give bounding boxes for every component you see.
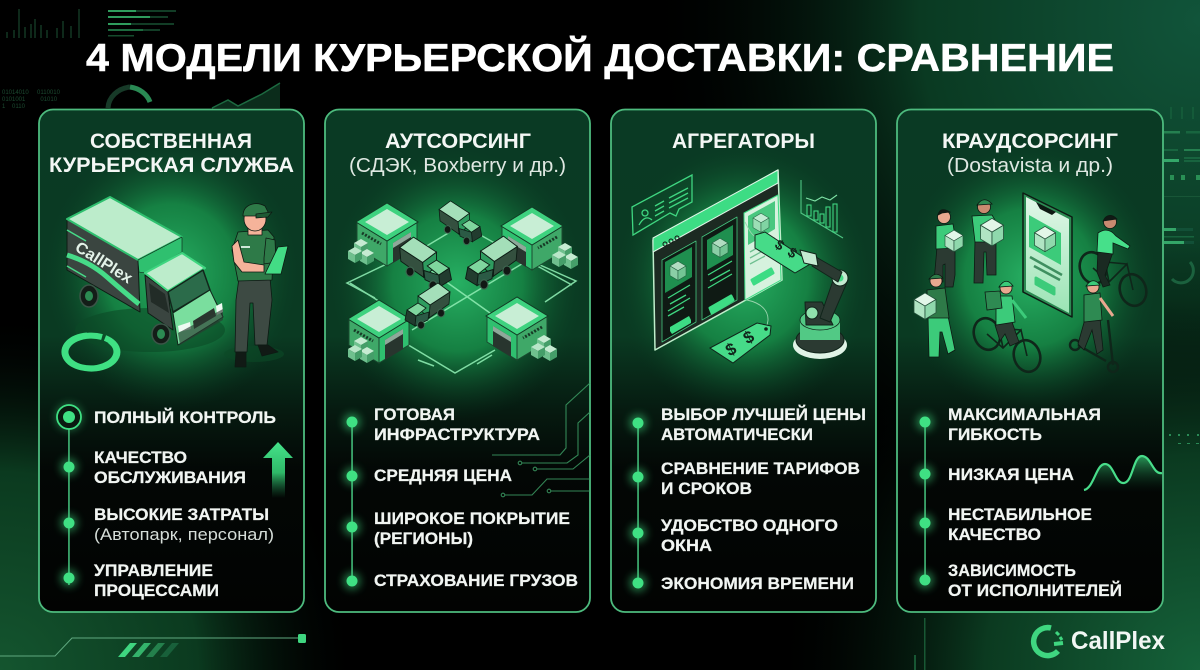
list: собственная служба: ОБСЛУЖИВАНИЯ [94,468,246,487]
panel: аутсорсинг [325,110,590,612]
panel: краудсорсинг [897,110,1163,612]
illustration: bicycle courier right [1076,215,1150,309]
heading: аутсорсинг [349,130,566,177]
logo: CallPlex [1034,627,1165,656]
decorative gauge and line top left: 1 0110 [2,104,26,110]
list: агрегаторы: СРАВНЕНИЕ ТАРИФОВ [661,459,860,478]
decorative circuit bottom left [0,634,306,657]
heading: собственная служба: КУРЬЕРСКАЯ СЛУЖБА [49,154,294,177]
heading: краудсорсинг [942,130,1118,177]
decorative data bits right side [1164,107,1200,283]
icon: up arrow [263,442,293,498]
list: собственная служба: УПРАВЛЕНИЕ [94,561,213,580]
illustration: bicycle courier front [970,281,1044,375]
decorative circuit lines [492,383,590,497]
list: краудсорсинг: ГИБКОСТЬ [948,425,1042,444]
heading: агрегаторы: АГРЕГАТОРЫ [672,130,815,153]
decorative gauge and line top left [2,83,280,110]
illustration: delivery truck [67,197,225,352]
illustration: robot arm with tag: $ [785,244,800,261]
illustration: lower price tag: $ [740,327,758,348]
list: собственная служба: (Автопарк, персонал) [94,525,274,544]
cargo boxes [348,239,578,363]
illustration: smartphone [1023,193,1072,317]
list: аутсорсинг: СРЕДНЯЯ ЦЕНА [374,466,512,485]
list: краудсорсинг: КАЧЕСТВО [948,525,1041,544]
illustration: courier woman with box [934,210,963,287]
list: краудсорсинг: МАКСИМАЛЬНАЯ [948,405,1101,424]
decorative bars top left [108,10,176,36]
decorative lines bottom centre right [914,618,926,670]
decorative gauge and line top left: 0101001 01010 [2,97,58,103]
list: краудсорсинг: НИЗКАЯ ЦЕНА [948,465,1074,484]
illustration: profile card [632,175,692,235]
illustration: logistics network [347,201,578,373]
illustration: bar chart [801,180,843,238]
list: агрегаторы: ОКНА [661,536,712,555]
list: краудсорсинг [916,405,1122,600]
route lines [347,232,576,373]
list: краудсорсинг: ЗАВИСИМОСТЬ [948,561,1076,580]
heading: собственная служба: СОБСТВЕННАЯ [90,130,252,153]
illustration: courier with box [972,200,1004,283]
icon: green ring [64,336,117,369]
list: аутсорсинг [343,405,578,590]
logo: CallPlex: CallPlex [1071,627,1165,655]
list: аутсорсинг: СТРАХОВАНИЕ ГРУЗОВ [374,571,578,590]
list: собственная служба: ПОЛНЫЙ КОНТРОЛЬ [94,408,276,427]
illustration: robot arm with tag: $ [772,236,788,254]
trucks [400,201,517,329]
illustration: robot arm with tag [745,222,848,359]
list: агрегаторы: И СРОКОВ [661,479,752,498]
heading: аутсорсинг: АУТСОРСИНГ [385,130,531,153]
panel: агрегаторы [611,110,876,612]
heading: аутсорсинг: (СДЭК, Boxberry и др.) [349,155,566,177]
list: агрегаторы: УДОБСТВО ОДНОГО [661,516,838,535]
list: собственная служба: ПРОЦЕССАМИ [94,581,219,600]
heading: собственная служба [49,130,294,177]
illustration: courier with clipboard [224,204,288,367]
list: аутсорсинг: ШИРОКОЕ ПОКРЫТИЕ [374,509,570,528]
list: агрегаторы: АВТОМАТИЧЕСКИ [661,425,813,444]
illustration: comparison window [653,170,782,350]
decorative dots lower right [1169,434,1199,444]
list: собственная служба: КАЧЕСТВО [94,448,187,467]
heading: краудсорсинг: КРАУДСОРСИНГ [942,130,1118,153]
decorative gauge and line top left: 01014010 0110010 [2,90,61,96]
list: агрегаторы [629,405,866,593]
chart: price wave [1084,456,1162,492]
illustration: lower price tag: $ [722,339,740,360]
illustration: lower price tag [710,300,771,363]
list: аутсорсинг: ИНФРАСТРУКТУРА [374,425,540,444]
list: собственная служба [55,403,276,600]
list: аутсорсинг: ГОТОВАЯ [374,405,455,424]
illustration: courier carrying box [914,274,955,357]
heading: краудсорсинг: (Dostavista и др.) [947,155,1113,177]
list: краудсорсинг: НЕСТАБИЛЬНОЕ [948,505,1092,524]
list: краудсорсинг: ОТ ИСПОЛНИТЕЛЕЙ [948,581,1122,600]
illustration: delivery truck: CallPlex [72,239,135,287]
panel: собственная курьерская служба [39,110,304,612]
list: аутсорсинг: (РЕГИОНЫ) [374,529,473,548]
warehouses [348,203,563,363]
list: собственная служба: ВЫСОКИЕ ЗАТРАТЫ [94,505,269,524]
list: агрегаторы: ЭКОНОМИЯ ВРЕМЕНИ [661,574,854,593]
list: агрегаторы: ВЫБОР ЛУЧШЕЙ ЦЕНЫ [661,405,866,424]
title: 4 МОДЕЛИ КУРЬЕРСКОЙ ДОСТАВКИ: СРАВНЕНИЕ [86,35,1114,80]
illustration: scooter courier [1070,281,1118,372]
decorative mini bar chart top left [6,9,80,38]
